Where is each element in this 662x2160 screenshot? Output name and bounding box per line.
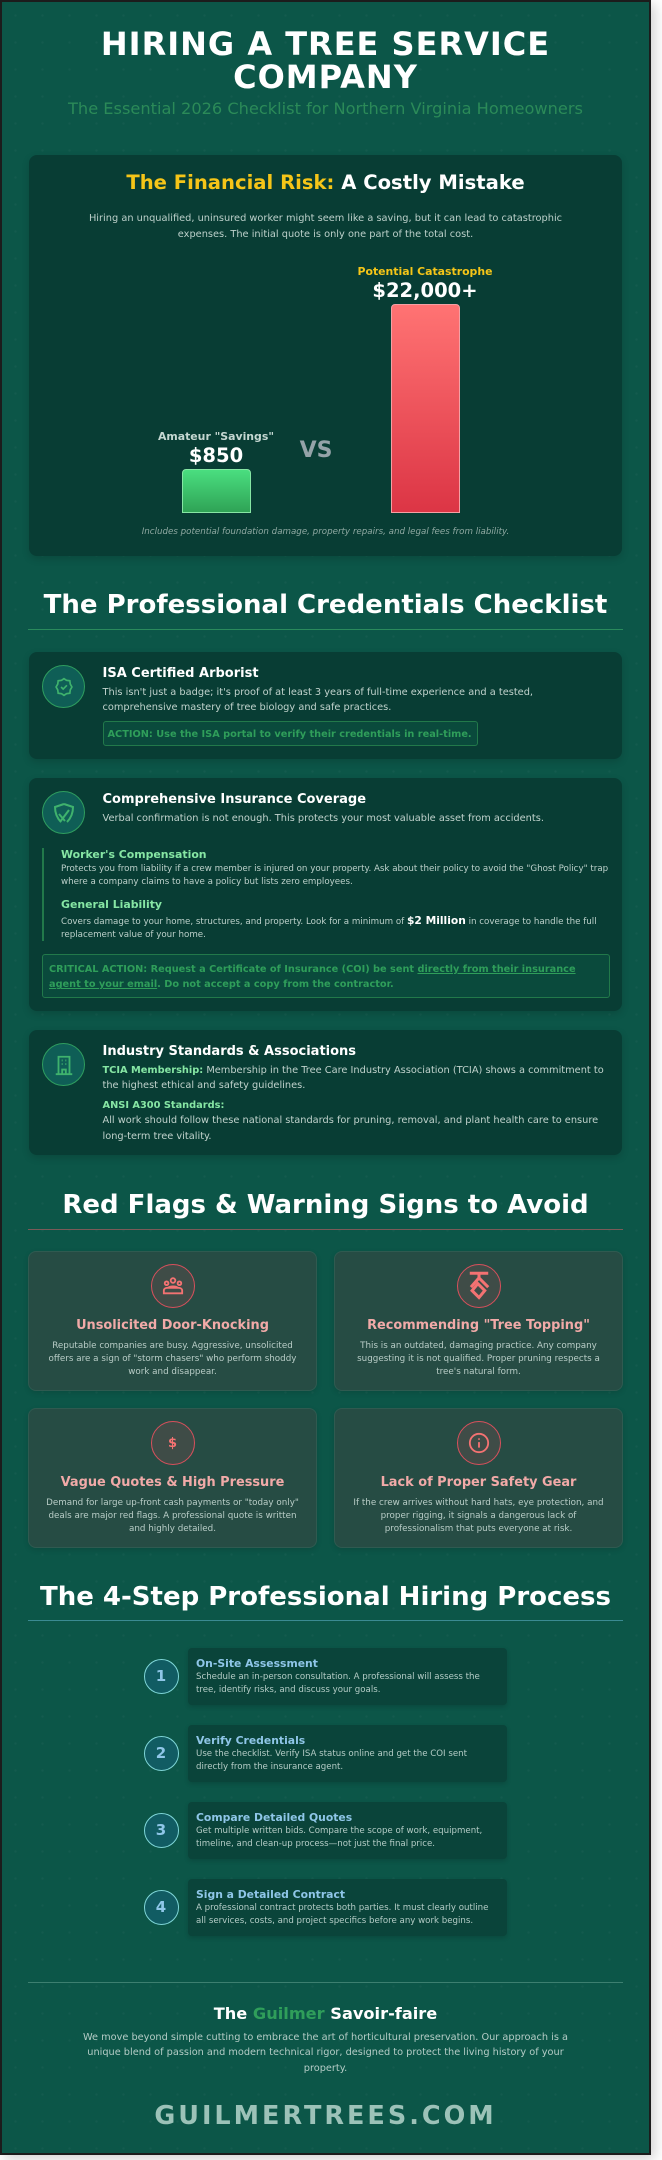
card: insurance coverage [29,778,622,1011]
flag title: Recommending "Tree Topping" [367,1318,590,1333]
footer text: property. [304,2063,347,2074]
footnote: Includes potential foundation damage, property repairs, and legal fees from liability. [142,527,509,537]
icon: topped tree [456,1264,500,1308]
flag title: Vague Quotes & High Pressure [61,1475,284,1490]
step 1: Schedule an in-person consultation. A professional will assess the [196,1672,480,1682]
card: industry standards [29,1030,622,1155]
flag text: professionalism that puts everyone at risk. [385,1524,572,1534]
heading: hiring process: The 4-Step Professional Hiring Process [40,1582,611,1612]
flag text: Reputable companies are busy. Aggressive, unsolicited [52,1341,293,1351]
flag text: proper rigging, it signals a dangerous lack of [381,1511,576,1521]
step 4: A professional contract protects both parties. It must clearly outline [196,1903,488,1913]
action callout [102,721,478,746]
red flag: vague quotes [28,1408,317,1548]
flag text: suggesting it is not qualified. Proper pruning respects a [357,1354,600,1364]
icon: info [456,1421,500,1465]
step 3: timeline, and clean-up process—not just the final price. [196,1839,435,1849]
title: COMPANY [233,58,418,96]
flag text: This is an outdated, damaging practice. Any company [360,1341,597,1351]
step 3: Compare Detailed Quotes [196,1811,352,1824]
step 3 [188,1802,507,1859]
step 1 [188,1648,507,1705]
website: GUILMERTREES.COM [154,2101,497,2131]
icon: shield [42,791,85,834]
bar: catastrophe [391,304,460,513]
flag text: work and disappear. [128,1367,217,1377]
general liability: General Liability [61,898,162,911]
flag text [357,1341,600,1377]
flag text: Demand for large up-front cash payments or "today only" [46,1498,299,1508]
step 1 number [144,1659,178,1694]
label: amateur savings: Amateur "Savings" [158,430,274,443]
panel description: Hiring an unqualified, uninsured worker might seem like a saving, but it can lead to catastrophic [89,213,562,224]
worker's compensation: where a company claims to have a policy but lists zero employees. [61,877,353,887]
critical action callout [42,954,610,998]
icon: people [150,1264,194,1308]
critical action callout: CRITICAL ACTION: Request a Certificate of Insurance (COI) be sent directly from their insurance [49,964,576,975]
heading: red flags: Red Flags & Warning Signs to Avoid [62,1190,589,1220]
card title: Industry Standards & Associations [102,1044,356,1059]
footer heading: The Guilmer Savoir-faire [214,2004,437,2023]
card title: ISA Certified Arborist [102,666,259,681]
TCIA membership [102,1065,604,1091]
step 1 number: 1 [156,1667,166,1685]
red flag: safety gear [334,1408,623,1548]
red flag: tree topping [334,1251,623,1391]
worker's compensation [61,848,608,887]
red flag: door-knocking [28,1251,317,1391]
step 3: Get multiple written bids. Compare the scope of work, equipment, [196,1826,482,1836]
value: $850: $850 [189,444,243,467]
vs label: VS [300,438,332,463]
flag text: offers are a sign of "storm chasers" who perform shoddy [49,1354,296,1364]
panel heading: The Financial Risk: A Costly Mistake [126,171,525,194]
coverage list [42,848,614,941]
title [101,25,550,96]
flag text: deals are major red flags. A professional quote is written [48,1511,297,1521]
TCIA membership: the highest ethical and safety guidelines. [102,1080,305,1091]
step 2 number: 2 [156,1744,166,1762]
panel description: expenses. The initial quote is only one part of the total cost. [178,228,473,240]
general liability: replacement value of your home. [61,930,206,940]
footer text: unique blend of passion and modern technical rigor, designed to protect the living history of your [87,2047,564,2058]
card text [102,687,533,713]
step 2: Use the checklist. Verify ISA status online and get the COI sent [196,1749,467,1759]
step 4: Sign a Detailed Contract [196,1888,345,1901]
icon: dollar: $ [168,1436,177,1450]
step 2: directly from the insurance agent. [196,1762,343,1772]
general liability [61,898,597,940]
step 1: On-Site Assessment [196,1657,318,1670]
worker's compensation: Protects you from liability if a crew member is injured on your property. Ask about their policy to avoid the "Ghost Policy" trap [61,864,608,874]
TCIA membership: TCIA Membership: Membership in the Tree Care Industry Association (TCIA) shows a commitment to [102,1065,604,1076]
ANSI standards: All work should follow these national standards for pruning, removal, and plant health care to ensure [102,1115,598,1126]
step 4 [188,1879,507,1936]
bar chart: cost comparison [158,265,492,513]
step 3 number: 3 [156,1821,166,1839]
card text: Verbal confirmation is not enough. This protects your most valuable asset from accidents. [102,813,544,824]
step 2 [188,1725,507,1782]
label: potential catastrophe: Potential Catastrophe [358,265,492,278]
subtitle: The Essential 2026 Checklist for Northern Virginia Homeowners [68,99,583,118]
card title: Comprehensive Insurance Coverage [102,792,366,807]
critical action callout: agent to your email. Do not accept a copy from the contractor. [49,979,394,990]
flag title: Lack of Proper Safety Gear [381,1475,576,1490]
heading: credentials: The Professional Credentials Checklist [44,590,607,620]
flag text: tree's natural form. [436,1367,521,1377]
flag text: If the crew arrives without hard hats, eye protection, and [353,1498,604,1508]
step 4 number [144,1890,178,1925]
action callout: ACTION: Use the ISA portal to verify their credentials in real-time. [108,729,472,740]
title: HIRING A TREE SERVICE [101,25,550,63]
icon: building [42,1043,85,1086]
flag text: and highly detailed. [129,1524,216,1534]
footer text: We move beyond simple cutting to embrace the art of horticultural preservation. Our approach is a [83,2032,568,2043]
icon: badge check [42,665,85,708]
card: ISA certified arborist [29,652,622,759]
footer text [83,2032,568,2074]
panel: financial risk [29,155,622,556]
step 1: tree, identify risks, and discuss your goals. [196,1685,380,1695]
panel description [89,213,562,240]
card text: This isn't just a badge; it's proof of at least 3 years of full-time experience and a tested, [102,687,533,698]
ANSI standards [102,1100,598,1142]
bar: amateur [182,469,250,513]
flag title: Unsolicited Door-Knocking [76,1318,269,1333]
step 4 number: 4 [156,1898,166,1916]
worker's compensation: Worker's Compensation [61,848,207,861]
card text: comprehensive mastery of tree biology and safe practices. [102,702,391,713]
flag text [46,1498,299,1534]
general liability: Covers damage to your home, structures, and property. Look for a minimum of $2 Million in coverage to handle the full [61,914,597,927]
ANSI standards: ANSI A300 Standards: [102,1100,224,1111]
icon: dollar [150,1421,194,1465]
flag text [353,1498,604,1534]
ANSI standards: long-term tree vitality. [102,1131,212,1142]
step 2 number [144,1736,178,1771]
step 4: all services, costs, and project specifics before any work begins. [196,1916,473,1926]
flag text [49,1341,296,1377]
step 3 number [144,1813,178,1848]
value: $22,000+: $22,000+ [372,279,478,302]
step 2: Verify Credentials [196,1734,305,1747]
